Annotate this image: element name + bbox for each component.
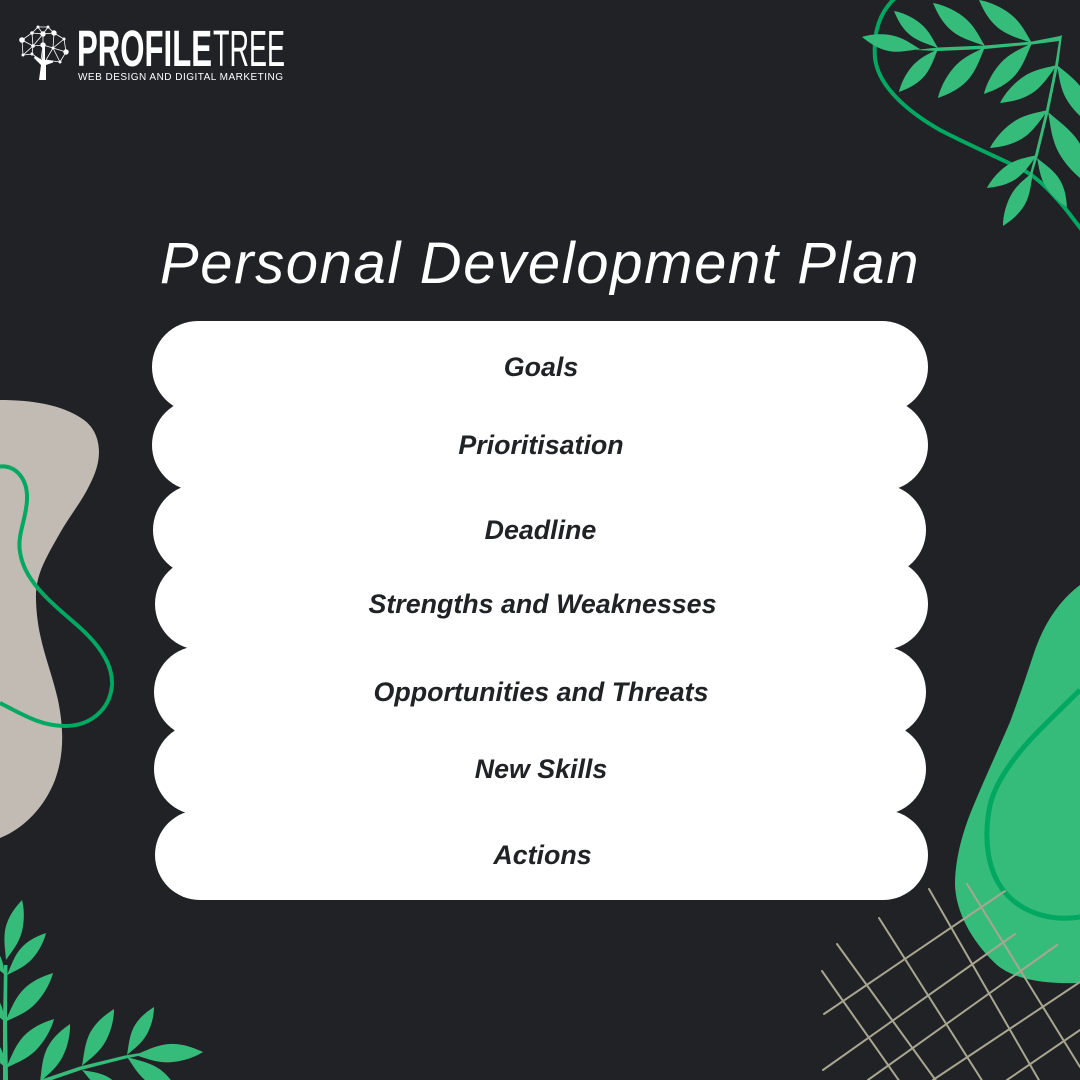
row: Actions: Actions <box>493 840 592 870</box>
icon: network tree <box>19 26 69 80</box>
row: Opportunities and Threats: Opportunities and Threats <box>374 676 708 706</box>
right green blob with line <box>955 585 1080 983</box>
row: New Skills: New Skills <box>475 754 607 784</box>
row: Deadline <box>153 484 926 576</box>
logo: ProfileTree: TREE <box>213 20 285 77</box>
bottom-left leafy branches <box>0 898 203 1080</box>
title: Personal Development Plan <box>160 231 920 296</box>
top-right leafy branch <box>860 0 1080 230</box>
row: Strengths and Weaknesses: Strengths and Weaknesses <box>368 588 716 618</box>
row: Prioritisation <box>152 399 928 491</box>
logo tagline: WEB DESIGN AND DIGITAL MARKETING <box>78 72 283 83</box>
row: Strengths and Weaknesses <box>155 558 928 650</box>
panel: scalloped list <box>152 321 928 900</box>
top-right curved green line <box>875 0 1080 230</box>
row: New Skills <box>154 723 926 815</box>
row: Actions <box>155 810 928 900</box>
logo: ProfileTree <box>19 20 285 83</box>
left beige blob with green line <box>0 400 112 838</box>
row: Prioritisation: Prioritisation <box>458 430 624 460</box>
row: Goals <box>152 321 928 413</box>
logo wordmark: PROFILE <box>77 20 212 77</box>
row: Opportunities and Threats <box>154 646 926 738</box>
grid of crossing lines <box>822 884 1080 1080</box>
row: Goals: Goals <box>504 352 578 382</box>
row: Deadline: Deadline <box>485 514 596 544</box>
